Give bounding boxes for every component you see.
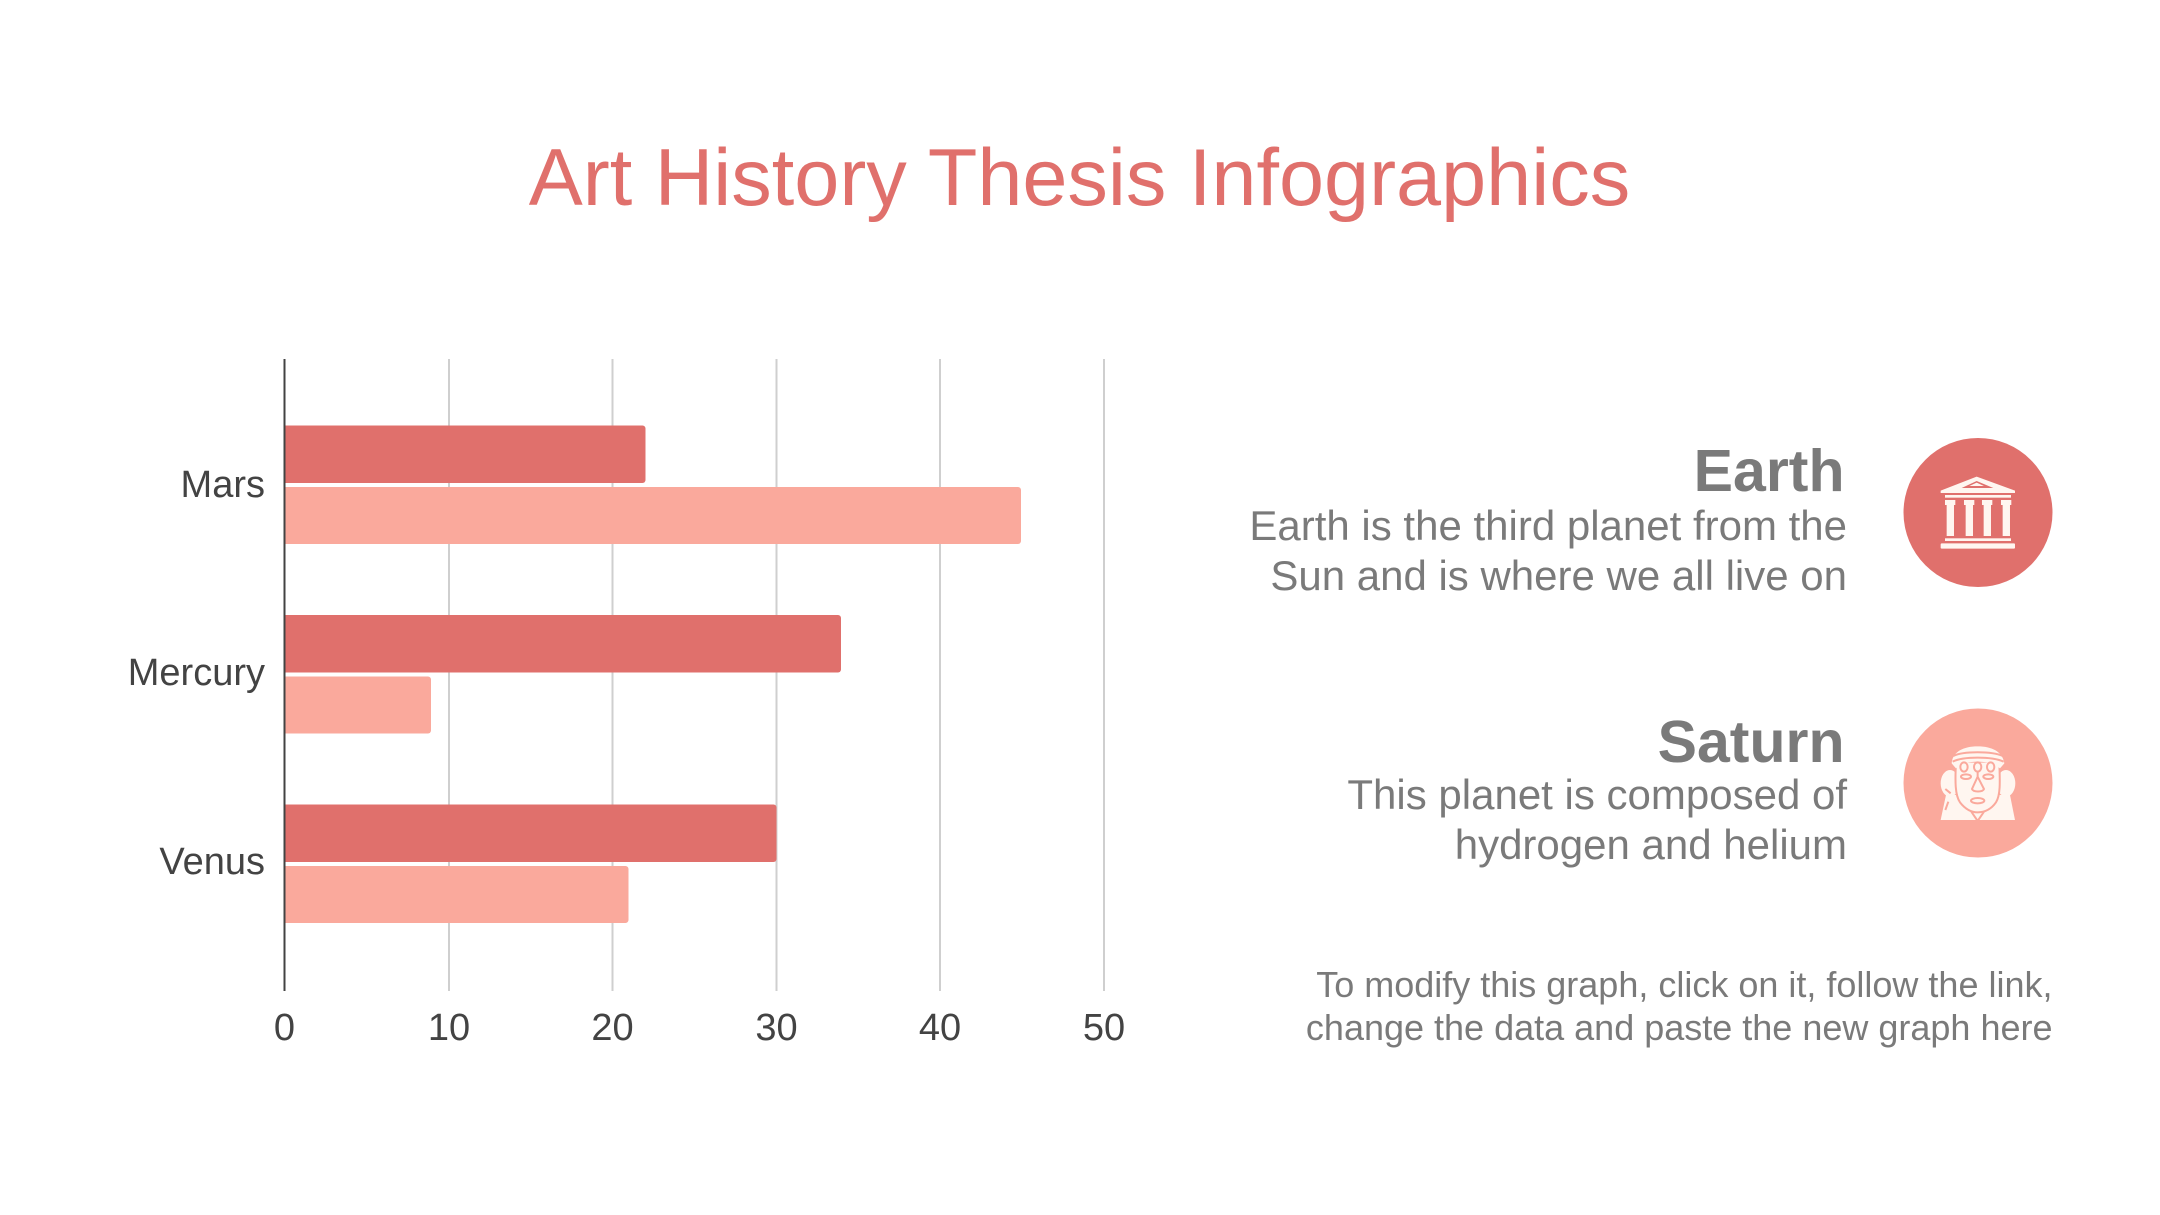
- value axis labels: 0: [274, 1007, 295, 1049]
- category labels: Mercury: [128, 652, 265, 694]
- Earth text block: Sun and is where we all live on: [1270, 552, 1847, 599]
- Saturn text block: [1347, 709, 1847, 868]
- vertical axis line: [284, 359, 286, 991]
- title: Art History Thesis Infographics: [529, 133, 1630, 223]
- bars: Venus: [285, 804, 776, 923]
- value axis labels: 50: [1083, 1007, 1125, 1049]
- Earth text block: [1249, 438, 1847, 599]
- value axis labels: [274, 1007, 1125, 1049]
- note text: change the data and paste the new graph here: [1306, 1007, 2052, 1048]
- note text: To modify this graph, click on it, follow the link,: [1316, 964, 2052, 1005]
- category labels: Mars: [181, 464, 265, 506]
- Saturn text block: This planet is composed of: [1347, 771, 1847, 818]
- value axis labels: 40: [919, 1007, 961, 1049]
- bars: Mars: [285, 426, 1021, 544]
- value axis labels: 20: [591, 1007, 634, 1049]
- Earth text block: Earth is the third planet from the: [1249, 502, 1847, 549]
- value axis labels: 10: [428, 1007, 470, 1049]
- category labels: [128, 464, 265, 883]
- value axis labels: 30: [755, 1007, 798, 1049]
- note text: [1306, 964, 2052, 1048]
- icon: Saturn circle with mask face: [1904, 708, 2052, 858]
- Saturn text block: Saturn: [1658, 709, 1844, 775]
- icon: Earth circle with temple: [1904, 438, 2052, 587]
- Saturn text block: hydrogen and helium: [1455, 821, 1847, 868]
- Earth text block: Earth: [1694, 438, 1844, 504]
- category labels: Venus: [159, 841, 265, 883]
- bar chart: [128, 359, 1125, 1049]
- bars: Mercury: [285, 615, 841, 734]
